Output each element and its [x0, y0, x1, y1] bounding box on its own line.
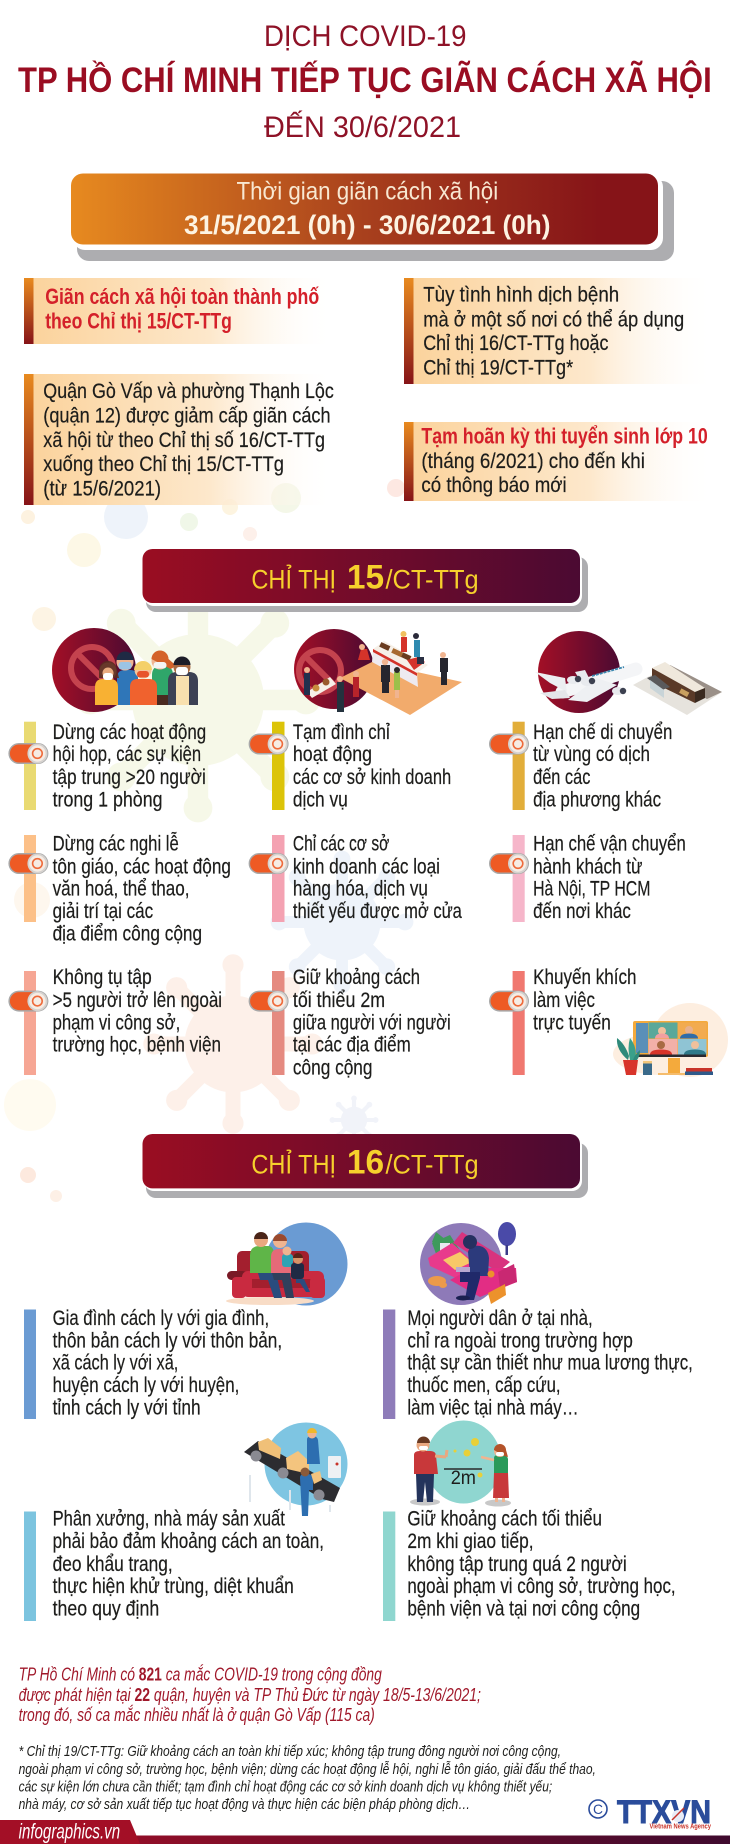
heading: directive 15	[142, 549, 588, 612]
item: stop gatherings	[8, 721, 206, 811]
panel: Go Vap and Thanh Loc	[24, 374, 335, 505]
icon: plane and bus	[535, 631, 722, 715]
panel: exam postponed: (tháng 6/2021) cho đến khi	[421, 450, 645, 473]
case statistics note: trong đó, số ca mắc nhiều nhất là ở quận Gò Vấp (115 ca)	[19, 1705, 375, 1725]
item: stop religious and cultural events: văn hoá, thể thao,	[53, 878, 189, 901]
title: ĐẾN 30/6/2021	[264, 110, 461, 144]
item: factories	[24, 1508, 324, 1621]
date banner: 31/5/2021 (0h) - 30/6/2021 (0h)	[184, 210, 550, 240]
icon: two people 2m apart	[410, 1420, 511, 1506]
item: stop religious and cultural events: Dừng các nghi lễ	[53, 832, 179, 855]
item: keep 2m distance: công cộng	[293, 1057, 372, 1080]
item: family isolation: tỉnh cách ly với tỉnh	[53, 1396, 201, 1419]
item: keep 2m distance: tối thiểu 2m	[293, 989, 385, 1012]
panel: exam postponed: có thông báo mới	[421, 474, 567, 497]
item: family isolation: thôn bản cách ly với thôn bản,	[53, 1329, 282, 1352]
logo: TTXVN: TTXVN	[617, 1794, 711, 1830]
panel: Go Vap and Thanh Loc: (quận 12) được giảm cấp giãn cách	[43, 404, 331, 428]
item: factories: theo quy định	[53, 1598, 159, 1621]
icon: family on sofa	[226, 1222, 348, 1306]
item: minimum distance: không tập trung quá 2 người	[407, 1553, 627, 1576]
item: family isolation: xã cách ly với xã,	[53, 1352, 178, 1375]
item: minimum distance: Giữ khoảng cách tối thiểu	[407, 1508, 602, 1531]
logo: TTXVN	[589, 1794, 711, 1830]
panel: Go Vap and Thanh Loc: xã hội từ theo Chỉ thị số 16/CT-TTg	[43, 429, 325, 452]
item: minimum distance	[383, 1508, 676, 1621]
item: stay at home: Mọi người dân ở tại nhà,	[407, 1307, 593, 1330]
item: restrict travel: địa phương khác	[533, 788, 661, 811]
item: restrict passenger transport: hành khách từ	[533, 855, 642, 878]
logo: TTXVN: Vietnam News Agency	[650, 1824, 711, 1830]
item: restrict travel: từ vùng có dịch	[533, 743, 650, 766]
icon: closed catering venue	[294, 629, 462, 715]
item: suspend services: dịch vụ	[293, 788, 348, 811]
item: factories: phải bảo đảm khoảng cách an toàn,	[53, 1530, 324, 1553]
item: encourage online work: làm việc	[533, 989, 595, 1012]
footnote: directive 19	[19, 1743, 596, 1813]
item: family isolation	[24, 1307, 282, 1419]
item: restrict passenger transport	[489, 832, 686, 923]
item: restrict travel	[489, 721, 672, 811]
item: keep 2m distance	[249, 966, 451, 1080]
panel: citywide distancing: theo Chỉ thị 15/CT-TTg	[45, 308, 232, 334]
item: factories: thực hiện khử trùng, diệt khuẩn	[53, 1575, 294, 1598]
heading: directive 16: CHỈ THỊ	[251, 1148, 336, 1180]
icon: video meeting monitor	[613, 1003, 728, 1077]
panel: directive 16 or 19 option: Tùy tình hình dịch bệnh	[423, 284, 619, 306]
item: essential businesses only: kinh doanh các loại	[293, 855, 440, 878]
heading: directive 16: /CT-TTg	[386, 1150, 479, 1180]
heading: directive 15: /CT-TTg	[386, 564, 479, 594]
item: family isolation: Gia đình cách ly với gia đình,	[53, 1307, 269, 1330]
panel: citywide distancing	[24, 278, 335, 344]
heading: directive 15: 15	[347, 558, 384, 596]
item: keep 2m distance: Giữ khoảng cách	[293, 966, 420, 989]
item: essential businesses only: Chỉ các cơ sở	[293, 832, 389, 855]
case statistics note: được phát hiện tại 22 quận, huyện và TP Thủ Đức từ ngày 18/5-13/6/2021;	[19, 1685, 481, 1705]
panel: Go Vap and Thanh Loc: xuống theo Chỉ thị 15/CT-TTg	[43, 453, 284, 476]
item: restrict passenger transport: Hạn chế vận chuyển	[533, 832, 686, 855]
item: suspend services: Tạm đình chỉ	[293, 721, 390, 744]
item: stay at home: chỉ ra ngoài trong trường hợp	[407, 1329, 633, 1352]
background virus decoration	[4, 479, 413, 1202]
item: stop religious and cultural events	[8, 832, 231, 946]
item: suspend services	[249, 721, 451, 811]
title: DỊCH COVID-19	[264, 20, 466, 53]
panel: Go Vap and Thanh Loc: (từ 15/6/2021)	[43, 478, 161, 500]
panel: directive 16 or 19 option: Chỉ thị 19/CT-TTg*	[423, 356, 573, 380]
icon: masked crowd	[52, 628, 198, 712]
item: encourage online work	[489, 966, 636, 1075]
case statistics note: TP Hồ Chí Minh có 821 ca mắc COVID-19 trong cộng đồng	[19, 1665, 382, 1685]
item: stay at home: làm việc tại nhà máy…	[407, 1396, 579, 1419]
item: no gatherings over 5: trường học, bệnh viện	[53, 1034, 221, 1057]
item: essential businesses only	[249, 832, 462, 923]
item: essential businesses only: thiết yếu được mở cửa	[293, 900, 462, 923]
item: suspend services: các cơ sở kinh doanh	[293, 766, 451, 789]
footnote: directive 19: các sự kiện lớn chưa cần thiết; tạm đình chỉ hoạt động các cơ sở kinh doanh dịch vụ không thiết yếu;	[19, 1779, 552, 1796]
item: encourage online work: trực tuyến	[533, 1012, 611, 1034]
footnote: directive 19: nhà máy, cơ sở sản xuất tiếp tục hoạt động và thực hiện các biện pháp phòng dịch…	[19, 1796, 470, 1813]
panel: Go Vap and Thanh Loc: Quận Gò Vấp và phường Thạnh Lộc	[43, 380, 334, 403]
item: suspend services: hoạt động	[293, 743, 372, 766]
item: stop gatherings: Dừng các hoạt động	[53, 721, 206, 744]
item: encourage online work: Khuyến khích	[533, 966, 636, 989]
item: keep 2m distance: giữa người với người	[293, 1012, 451, 1034]
panel: citywide distancing: Giãn cách xã hội toàn thành phố	[45, 284, 319, 309]
footnote: directive 19: ngoài phạm vi công sở, trường học, bệnh viện; dừng các hoạt động lễ hội, nghi lễ tôn giáo, giải đấu thể thao,	[19, 1761, 596, 1778]
item: stop religious and cultural events: tôn giáo, các hoạt động	[53, 855, 231, 878]
item: restrict passenger transport: đến nơi khác	[533, 900, 631, 923]
panel: directive 16 or 19 option	[404, 278, 715, 384]
item: stop religious and cultural events: giải trí tại các	[53, 900, 153, 923]
item: no gatherings over 5: >5 người trở lên ngoài	[53, 989, 222, 1012]
item: family isolation: huyện cách ly với huyện,	[53, 1374, 239, 1397]
date banner: Thời gian giãn cách xã hội	[236, 178, 498, 206]
item: no gatherings over 5	[8, 966, 222, 1075]
item: factories: đeo khẩu trang,	[53, 1553, 173, 1576]
heading: directive 15: CHỈ THỊ	[251, 562, 336, 594]
item: stop gatherings: tập trung >20 người	[53, 766, 206, 789]
panel: exam postponed	[404, 422, 715, 501]
icon: man at home on pink sofa	[420, 1222, 517, 1305]
item: stay at home	[383, 1307, 693, 1419]
case statistics note	[19, 1665, 481, 1725]
date banner	[71, 174, 674, 261]
logo: TTXVN: C	[593, 1801, 603, 1817]
footer bar	[0, 1820, 730, 1844]
footnote: directive 19: * Chỉ thị 19/CT-TTg: Giữ khoảng cách an toàn khi tiếp xúc; không tập trung đông người nơi công cộng,	[19, 1743, 561, 1760]
item: minimum distance: bệnh viện và tại nơi công cộng	[407, 1598, 640, 1621]
item: stay at home: thuốc men, cấp cứu,	[407, 1374, 561, 1397]
item: stop gatherings: trong 1 phòng	[53, 788, 162, 811]
heading: directive 16: 16	[347, 1144, 384, 1182]
item: minimum distance: 2m khi giao tiếp,	[407, 1530, 534, 1553]
item: factories: Phân xưởng, nhà máy sản xuất	[53, 1508, 285, 1531]
item: stop gatherings: hội họp, các sự kiện	[53, 743, 201, 766]
heading: directive 16	[142, 1134, 588, 1198]
panel: directive 16 or 19 option: mà ở một số nơi có thể áp dụng	[423, 308, 684, 332]
icon: factory conveyor	[244, 1422, 348, 1516]
panel: directive 16 or 19 option: Chỉ thị 16/CT-TTg hoặc	[423, 332, 608, 355]
item: keep 2m distance: tại các địa điểm	[293, 1034, 411, 1057]
item: essential businesses only: hàng hóa, dịch vụ	[293, 878, 428, 901]
item: no gatherings over 5: Không tụ tập	[53, 966, 152, 989]
icon: two people 2m apart: 2m	[451, 1468, 476, 1489]
title	[18, 20, 712, 144]
footer bar: infographics.vn	[19, 1820, 120, 1844]
item: restrict travel: Hạn chế di chuyển	[533, 721, 672, 744]
item: stop religious and cultural events: địa điểm công cộng	[53, 923, 202, 946]
item: restrict travel: đến các	[533, 766, 590, 789]
item: restrict passenger transport: Hà Nội, TP HCM	[533, 878, 650, 901]
item: no gatherings over 5: phạm vi công sở,	[53, 1012, 180, 1034]
